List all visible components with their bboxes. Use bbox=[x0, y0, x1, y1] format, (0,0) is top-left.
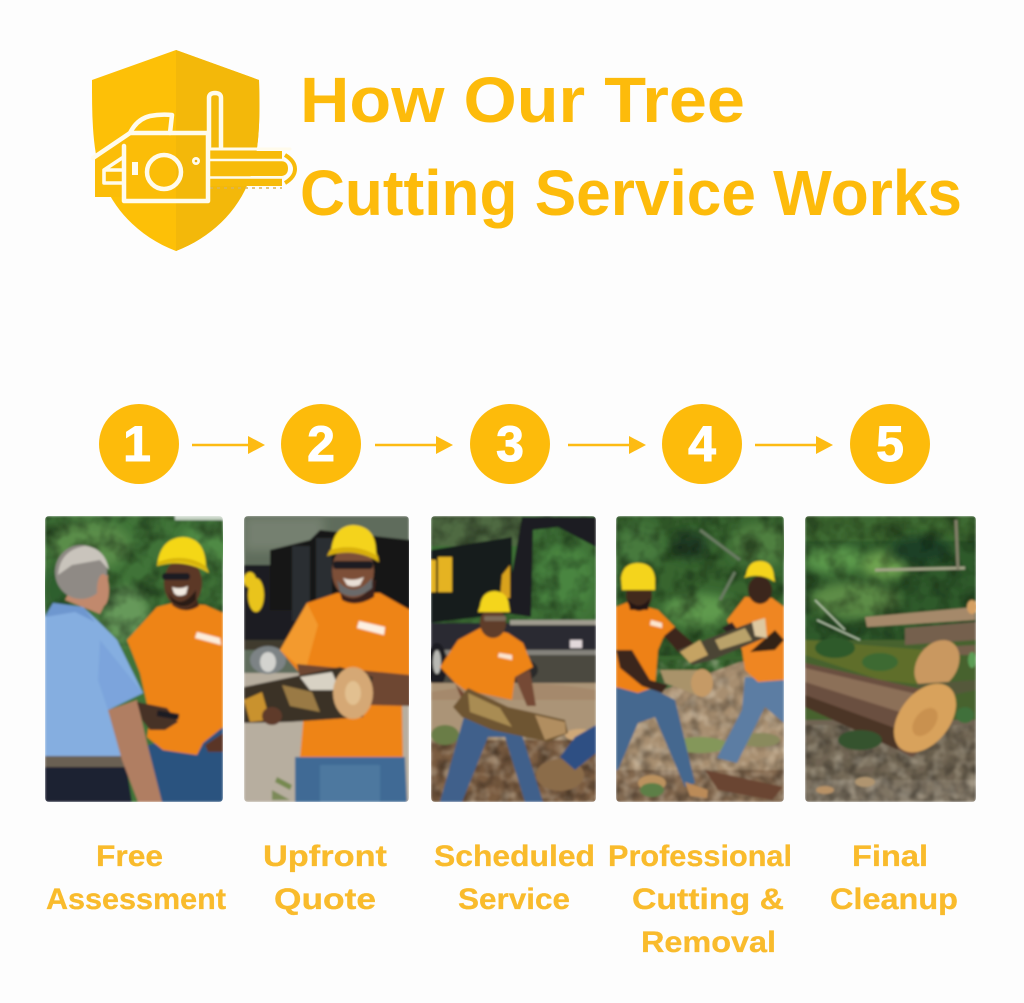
photo 5: final cleanup bbox=[805, 516, 977, 802]
label: free assessment: Assessment bbox=[46, 883, 226, 916]
step 4 badge bbox=[662, 404, 742, 484]
label: professional cutting and removal: Professional bbox=[608, 840, 792, 873]
label: professional cutting and removal bbox=[608, 840, 792, 959]
title: Cutting Service Works bbox=[300, 157, 962, 229]
step 1 badge: 1 bbox=[123, 416, 151, 472]
label: scheduled service: Scheduled bbox=[434, 840, 595, 873]
label: free assessment bbox=[46, 840, 226, 916]
step 3 badge: 3 bbox=[496, 416, 524, 472]
label: final cleanup: Final bbox=[852, 840, 928, 873]
step number row bbox=[99, 404, 930, 484]
arrow 1 to 2 bbox=[192, 436, 265, 454]
label: upfront quote: Quote bbox=[274, 883, 376, 916]
label: professional cutting and removal: Cutting & bbox=[632, 883, 784, 916]
step 1 badge bbox=[99, 404, 179, 484]
label: scheduled service bbox=[434, 840, 595, 916]
step 5 badge: 5 bbox=[876, 416, 904, 472]
title bbox=[300, 64, 962, 229]
photo 3: scheduled service bbox=[427, 516, 596, 802]
label: upfront quote: Upfront bbox=[263, 840, 387, 873]
label: upfront quote bbox=[263, 840, 387, 916]
step 3 badge bbox=[470, 404, 550, 484]
label: scheduled service: Service bbox=[458, 883, 570, 916]
step 5 badge bbox=[850, 404, 930, 484]
title: How Our Tree bbox=[300, 64, 745, 136]
step 4 badge: 4 bbox=[688, 416, 716, 472]
arrow 3 to 4 bbox=[568, 436, 646, 454]
icon: shield with chainsaw bbox=[92, 50, 295, 251]
photo 1: free assessment conversation bbox=[41, 516, 230, 802]
step 2 badge: 2 bbox=[307, 416, 335, 472]
label: final cleanup bbox=[830, 840, 958, 916]
photo 2: upfront quote bbox=[244, 516, 410, 802]
photo 4: professional cutting and removal bbox=[616, 516, 790, 802]
arrow 4 to 5 bbox=[755, 436, 833, 454]
label: professional cutting and removal: Removal bbox=[641, 926, 776, 959]
arrow 2 to 3 bbox=[375, 436, 453, 454]
step 2 badge bbox=[281, 404, 361, 484]
label: final cleanup: Cleanup bbox=[830, 883, 958, 916]
label: free assessment: Free bbox=[96, 840, 163, 873]
